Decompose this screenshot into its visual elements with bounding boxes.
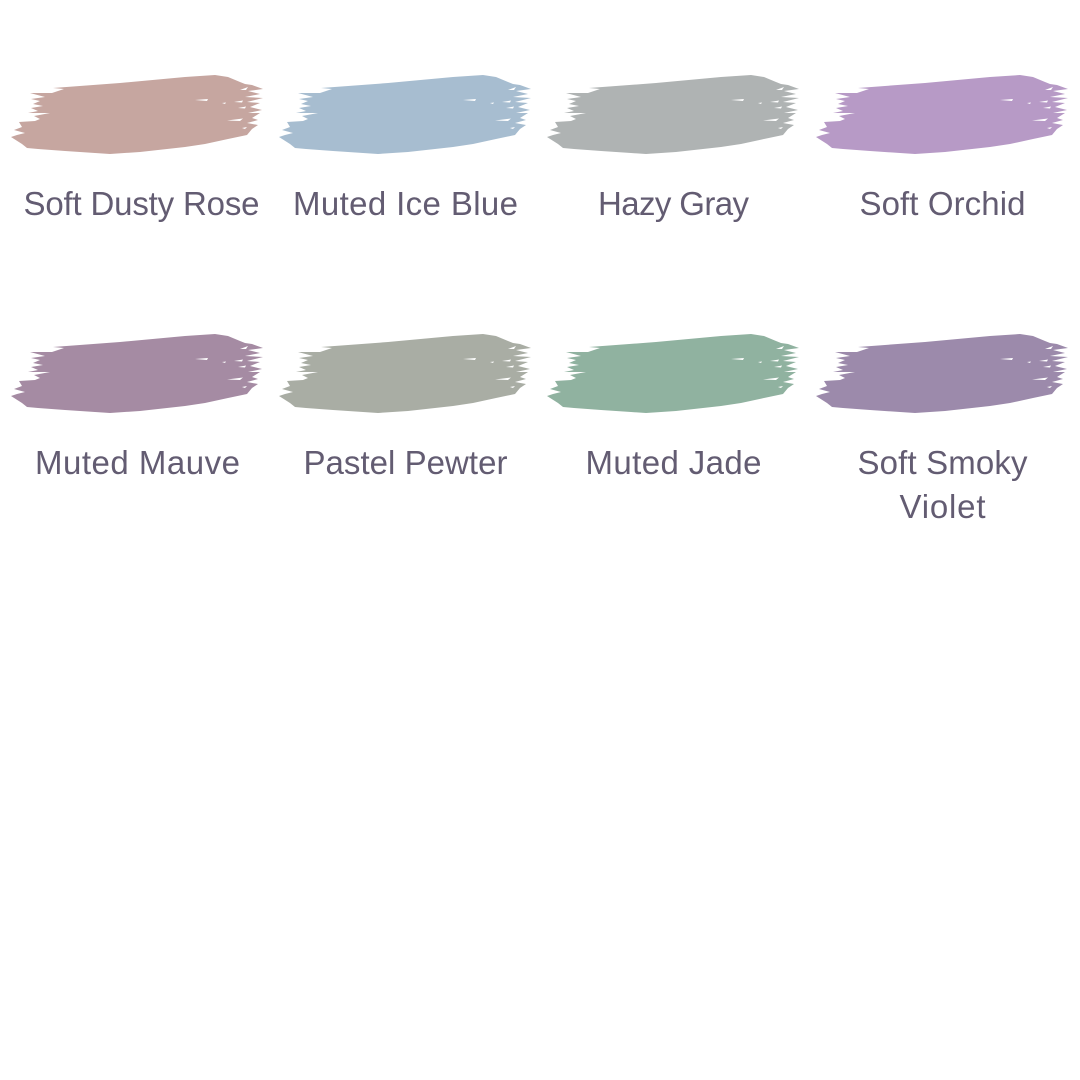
swatch: Hazy Gray: [547, 75, 799, 222]
swatch: Soft Orchid: [816, 75, 1068, 222]
brush stroke: Soft Dusty Rose: [11, 75, 263, 154]
brush stroke: Hazy Gray: [547, 75, 799, 154]
swatch: Soft Smoky Violet: [816, 334, 1068, 525]
brush stroke: Muted Jade: [547, 334, 799, 413]
label: Muted Mauve: Muted Mauve: [35, 444, 240, 481]
label: Hazy Gray: Hazy Gray: [598, 185, 750, 222]
swatch: Pastel Pewter: [279, 334, 531, 481]
label: Muted Jade: Muted Jade: [586, 444, 762, 481]
label: Soft Smoky Violet: Violet: [900, 488, 986, 525]
swatch: Muted Mauve: [11, 334, 263, 481]
brush stroke: Soft Smoky Violet: [816, 334, 1068, 413]
brush stroke: Muted Mauve: [11, 334, 263, 413]
label: Pastel Pewter: Pastel Pewter: [304, 444, 508, 481]
label: Soft Smoky Violet: Soft Smoky: [858, 444, 1028, 481]
swatch: Soft Dusty Rose: [11, 75, 263, 222]
label: Muted Ice Blue: Muted Ice Blue: [293, 185, 518, 222]
swatch: Muted Jade: [547, 334, 799, 481]
label: Soft Orchid: Soft Orchid: [860, 185, 1026, 222]
label: Soft Dusty Rose: Soft Dusty Rose: [24, 185, 260, 222]
swatch: Muted Ice Blue: [279, 75, 531, 222]
brush stroke: Pastel Pewter: [279, 334, 531, 413]
brush stroke: Soft Orchid: [816, 75, 1068, 154]
brush stroke: Muted Ice Blue: [279, 75, 531, 154]
